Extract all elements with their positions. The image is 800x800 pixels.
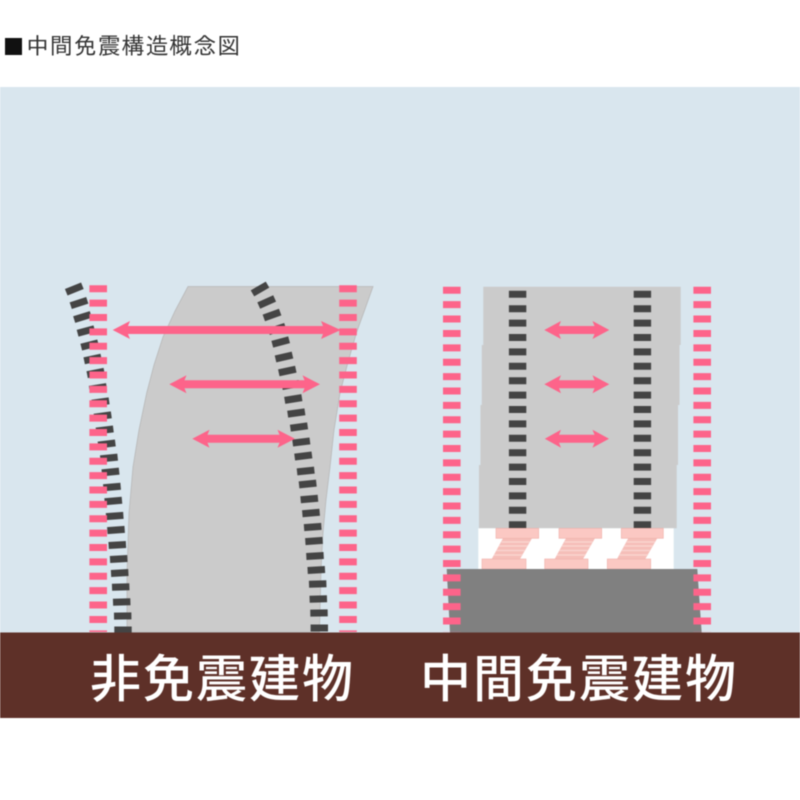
isolation layer: [478, 528, 674, 569]
title: 中間免震構造概念図: [26, 34, 241, 57]
arrow: large sway middle: [169, 375, 320, 393]
dashed line: original left position: [89, 285, 107, 632]
label: non-isolated building: 非免震建物: [90, 638, 355, 712]
arrow: large sway lower: [192, 430, 295, 448]
foundation block: [447, 569, 702, 633]
arrow: large sway top: [113, 321, 341, 339]
arrow: small sway top: [544, 321, 609, 339]
arrow: small sway lower: [545, 430, 609, 448]
dashed line: left column: [509, 291, 526, 528]
building body: upper structure: [479, 287, 681, 528]
ground band: [0, 632, 800, 718]
panel: mid-story isolated building: [447, 287, 702, 633]
sky background panel: [0, 87, 800, 633]
building body: swaying: [127, 286, 373, 632]
dashed line: deformed left position: [65, 282, 132, 634]
isolator 2: [545, 528, 602, 569]
panel: non-isolated building: [65, 282, 373, 634]
isolator 3: [607, 528, 663, 569]
dashed line: original right position: [339, 285, 357, 632]
arrow: small sway middle: [544, 375, 609, 393]
dashed line: right reference: [693, 287, 711, 632]
dashed line: deformed right position: [251, 282, 328, 632]
dashed line: right column: [634, 291, 651, 528]
isolator 1: [482, 528, 539, 569]
dashed line: left reference: [443, 287, 461, 632]
label: mid-story isolated building: 中間免震建物: [420, 638, 738, 712]
